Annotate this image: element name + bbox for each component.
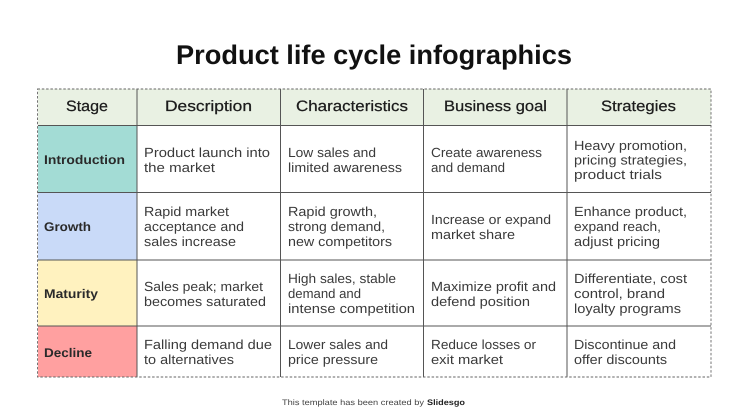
stage labels: Decline (44, 346, 92, 360)
business goal column: Maximize profit and (431, 279, 556, 294)
business goal column: market share (431, 227, 515, 242)
characteristics column: limited awareness (288, 160, 402, 175)
business goal column: and demand (431, 160, 505, 175)
strategies column: Enhance product, (574, 204, 687, 219)
strategies column: Discontinue and (574, 337, 676, 352)
characteristics column: High sales, stable (288, 271, 396, 286)
characteristics column: strong demand, (288, 219, 385, 234)
strategies column: control, brand (574, 286, 665, 301)
strategies column: loyalty programs (574, 301, 681, 316)
description column: to alternatives (144, 352, 234, 367)
description column: Sales peak; market (144, 279, 263, 294)
business goal column: Reduce losses or (431, 337, 537, 352)
description column: the market (144, 160, 215, 175)
business goal column: exit market (431, 352, 503, 367)
description column: sales increase (144, 234, 236, 249)
characteristics column: demand and (288, 286, 361, 301)
description column (144, 145, 272, 367)
strategies column: pricing strategies, (574, 152, 687, 168)
strategies column: Differentiate, cost (574, 271, 687, 286)
stage labels: Introduction (44, 153, 125, 167)
strategies column: offer discounts (574, 352, 667, 367)
characteristics column (288, 145, 415, 367)
business goal column: defend position (431, 294, 530, 309)
stage labels (44, 153, 125, 360)
header row background (38, 89, 711, 125)
footer credit: Slidesgo (427, 398, 465, 407)
description column: Falling demand due (144, 337, 272, 352)
description column: becomes saturated (144, 294, 266, 309)
description column: Rapid market (144, 204, 229, 219)
strategies column: expand reach, (574, 219, 661, 234)
column headers (66, 98, 676, 115)
strategies column: adjust pricing (574, 234, 660, 249)
characteristics column: Low sales and (288, 145, 376, 160)
column headers: Characteristics (296, 98, 408, 115)
stage colour cells (38, 125, 137, 377)
characteristics column: intense competition (288, 301, 415, 316)
description column: Product launch into (144, 145, 270, 160)
business goal column (431, 145, 556, 367)
description column: acceptance and (144, 219, 244, 234)
characteristics column: price pressure (288, 352, 378, 367)
strategies column: Heavy promotion, (574, 138, 687, 153)
characteristics column: new competitors (288, 234, 392, 249)
column headers: Stage (66, 98, 108, 115)
column headers: Description (165, 98, 252, 115)
strategies column (574, 138, 687, 367)
title: Product life cycle infographics (176, 40, 572, 70)
stage labels: Maturity (44, 287, 98, 301)
characteristics column: Rapid growth, (288, 204, 377, 219)
stage labels: Growth (44, 220, 91, 234)
column headers: Business goal (444, 98, 547, 115)
business goal column: Increase or expand (431, 212, 551, 227)
strategies column: product trials (574, 167, 662, 182)
footer credit: This template has been created by (282, 398, 424, 407)
characteristics column: Lower sales and (288, 337, 388, 352)
table (38, 89, 711, 377)
footer credit (282, 398, 465, 407)
business goal column: Create awareness (431, 145, 542, 160)
column headers: Strategies (601, 98, 676, 115)
